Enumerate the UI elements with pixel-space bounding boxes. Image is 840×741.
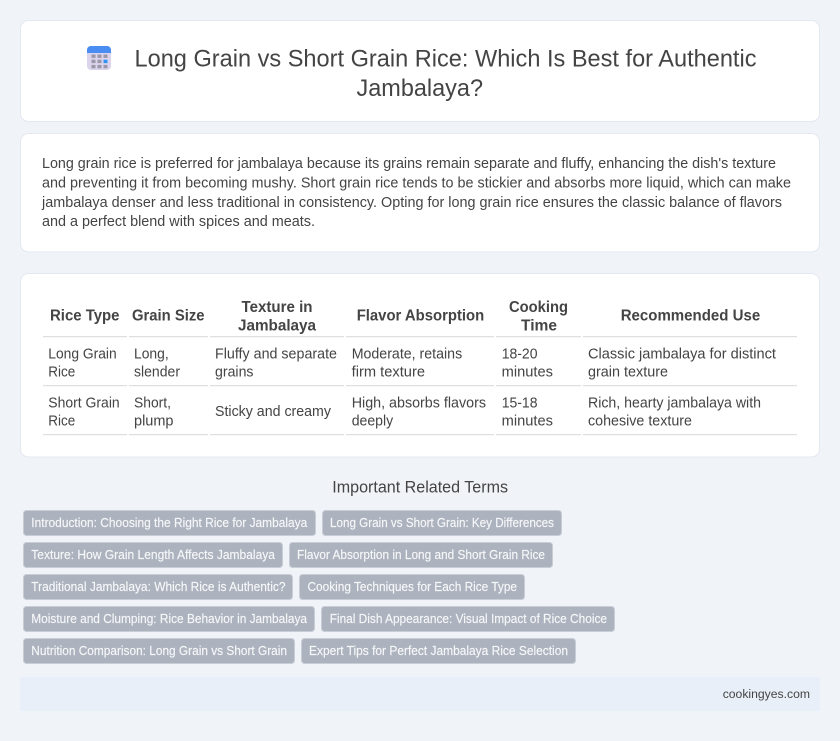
tag: Traditional Jambalaya: Which Rice is Authentic? — [31, 579, 285, 594]
tag — [24, 574, 292, 600]
table header row: Cooking — [509, 299, 568, 316]
table header row: Flavor Absorption — [357, 308, 484, 325]
table row: short grain rice: 15-18 — [502, 395, 538, 411]
tag: Final Dish Appearance: Visual Impact of Rice Choice — [330, 611, 607, 626]
tag: Texture: How Grain Length Affects Jambalaya — [31, 547, 276, 562]
table header row: Recommended Use — [621, 308, 760, 325]
table row: short grain rice: deeply — [352, 413, 394, 429]
tag — [24, 510, 316, 536]
panel: header — [20, 20, 820, 122]
text block: introduction: Long grain rice is preferred for jambalaya because its grains remain separate and fluffy, enhancing the dish's texture — [42, 156, 776, 172]
table row: short grain rice: Rice — [48, 413, 75, 429]
table row: long grain rice: Classic jambalaya for distinct — [588, 346, 776, 362]
tag: Moisture and Clumping: Rice Behavior in Jambalaya — [31, 611, 308, 626]
tag — [290, 542, 552, 568]
panel: introduction — [20, 134, 820, 252]
table row: short grain rice: Sticky and creamy — [215, 404, 332, 420]
tag — [24, 606, 314, 632]
tag: Cooking Techniques for Each Rice Type — [308, 579, 517, 594]
table row: short grain rice: Rich, hearty jambalaya with — [588, 395, 761, 411]
table row: short grain rice — [48, 395, 761, 429]
tag — [24, 638, 294, 664]
panel: related term tags — [24, 510, 614, 664]
table row: long grain rice: firm texture — [352, 364, 425, 380]
table row: short grain rice: plump — [134, 413, 174, 429]
table row: long grain rice: slender — [134, 364, 180, 380]
tag — [302, 638, 576, 664]
text block: introduction: and preventing it from becoming mushy. Short grain rice tends to be stickier and absorbs more liquid, which can make — [42, 175, 791, 191]
table row: short grain rice: cohesive texture — [588, 413, 692, 429]
table row: short grain rice: High, absorbs flavors — [352, 395, 486, 411]
table row: long grain rice: Fluffy and separate — [215, 346, 337, 362]
tag — [322, 510, 562, 536]
table row: short grain rice: Short Grain — [48, 395, 120, 411]
text block: introduction — [41, 156, 791, 230]
tag: Flavor Absorption in Long and Short Grain Rice — [297, 547, 545, 562]
title: Long Grain vs Short Grain Rice: Which Is Best for Authentic — [134, 46, 756, 73]
text block: introduction: and a perfect blend with spices and meats. — [42, 214, 315, 230]
tag — [300, 574, 524, 600]
panel: comparison table — [20, 274, 820, 457]
tag: Expert Tips for Perfect Jambalaya Rice Selection — [309, 643, 568, 658]
table row: long grain rice: grain texture — [588, 364, 668, 380]
footer source text: cookingyes.com — [723, 687, 810, 701]
table header row: Grain Size — [132, 308, 205, 325]
tag: Introduction: Choosing the Right Rice for Jambalaya — [31, 515, 308, 530]
tag: Nutrition Comparison: Long Grain vs Short Grain — [31, 643, 287, 658]
table row: long grain rice: Long, — [134, 346, 169, 362]
table header row: Time — [521, 318, 557, 335]
table row: short grain rice: Short, — [134, 395, 171, 411]
table row: long grain rice: minutes — [502, 364, 553, 380]
table row: long grain rice: grains — [215, 364, 254, 380]
title — [134, 46, 756, 102]
tag: Long Grain vs Short Grain: Key Differences — [330, 515, 554, 530]
table row: short grain rice: minutes — [502, 413, 553, 429]
table row: long grain rice: Rice — [48, 364, 75, 380]
tag — [24, 542, 282, 568]
footer — [20, 677, 820, 711]
heading: important related terms: Important Related Terms — [332, 479, 508, 497]
table row: long grain rice: 18-20 — [502, 346, 538, 362]
table row: long grain rice: Long Grain — [48, 346, 117, 362]
table header row: Jambalaya — [238, 318, 316, 335]
table header row — [50, 299, 760, 335]
icon: calendar — [87, 46, 111, 70]
text block: introduction: jambalaya denser and less traditional in consistency. Opting for long grain rice ensures the classic balance of flavors — [41, 195, 782, 211]
tag — [322, 606, 614, 632]
table header row: Texture in — [242, 299, 312, 316]
table row: long grain rice: Moderate, retains — [352, 346, 462, 362]
table row: long grain rice — [48, 346, 776, 380]
table header row: Rice Type — [50, 308, 120, 325]
title: Jambalaya? — [356, 75, 483, 102]
